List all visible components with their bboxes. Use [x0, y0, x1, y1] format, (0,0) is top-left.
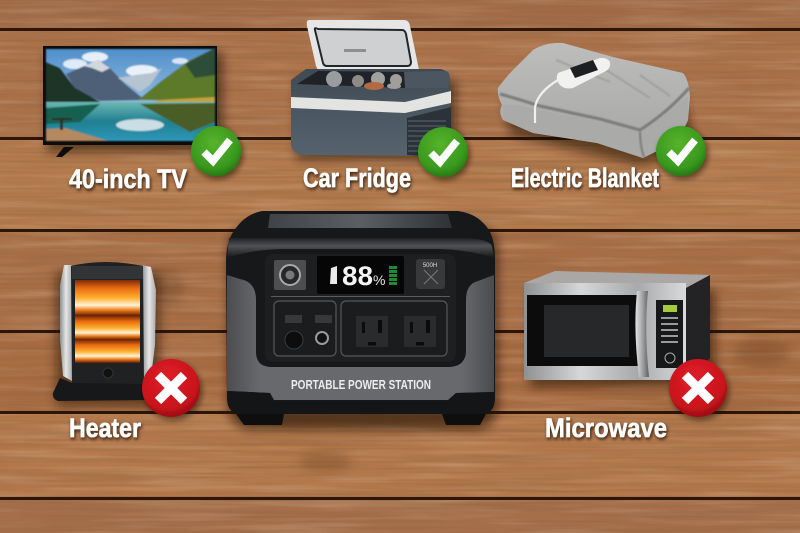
- microwave handle: [635, 291, 649, 377]
- station top shell: [226, 211, 495, 414]
- microwave top: [524, 271, 710, 288]
- badge: blanket supported check: [656, 126, 706, 176]
- station brand label: PORTABLE POWER STATION: [291, 378, 431, 392]
- power button: [274, 260, 306, 290]
- label: electric blanket: Electric Blanket: [511, 163, 659, 193]
- heater body: [71, 262, 144, 384]
- heater side panels: [60, 265, 72, 381]
- station grey body: [227, 275, 494, 400]
- fridge vents: [407, 107, 451, 156]
- badge: TV supported check: [191, 126, 241, 176]
- left port cluster: [274, 301, 336, 356]
- blanket lower layer: [503, 96, 688, 158]
- heater base: [53, 378, 146, 401]
- label: heater: Heater: [69, 413, 141, 443]
- AC outlet right: [404, 316, 436, 347]
- microwave door window: [527, 295, 645, 366]
- blanket cord: [535, 80, 558, 123]
- TV screen landscape: [46, 48, 215, 141]
- station feet: [236, 414, 284, 425]
- label: 40-inch TV: 40-inch TV: [69, 164, 187, 194]
- LCD display: [317, 256, 404, 294]
- station solar panel: [268, 214, 452, 228]
- folded blanket: [498, 43, 690, 158]
- blanket controller: [557, 58, 610, 88]
- USB-C button: [416, 259, 445, 289]
- station base band: [228, 391, 494, 414]
- fridge white band: [291, 91, 451, 113]
- label: car fridge: Car Fridge: [303, 163, 411, 193]
- LCD display: 88: [342, 261, 373, 291]
- AC outlets panel: [341, 301, 447, 356]
- badge: microwave not supported: [669, 359, 727, 417]
- item: electric blanket: [498, 43, 696, 165]
- label: microwave: Microwave: [545, 413, 667, 443]
- microwave side: [686, 275, 710, 380]
- USB-C button: 500H: [423, 263, 437, 269]
- panel divider: [271, 296, 450, 298]
- AC outlet left: [356, 316, 388, 347]
- icon: TV bezel: [43, 46, 217, 145]
- heater glowing elements: [75, 280, 140, 363]
- badge: heater not supported: [142, 359, 200, 417]
- microwave front: [524, 283, 686, 380]
- blanket fold shadow: [500, 60, 689, 157]
- badge: fridge supported check: [418, 127, 468, 177]
- item: microwave: [524, 271, 715, 387]
- fridge open lid: [307, 20, 419, 72]
- icon: TV stand foot: [56, 147, 74, 157]
- LCD display: %: [373, 272, 385, 288]
- fridge body: [291, 69, 451, 156]
- item: car fridge: [291, 20, 456, 160]
- item: 40-inch TV: [43, 46, 223, 157]
- station control panel: [265, 254, 456, 362]
- microwave control panel: [656, 300, 683, 368]
- portable power station: [226, 211, 498, 430]
- item: heater: [53, 262, 160, 406]
